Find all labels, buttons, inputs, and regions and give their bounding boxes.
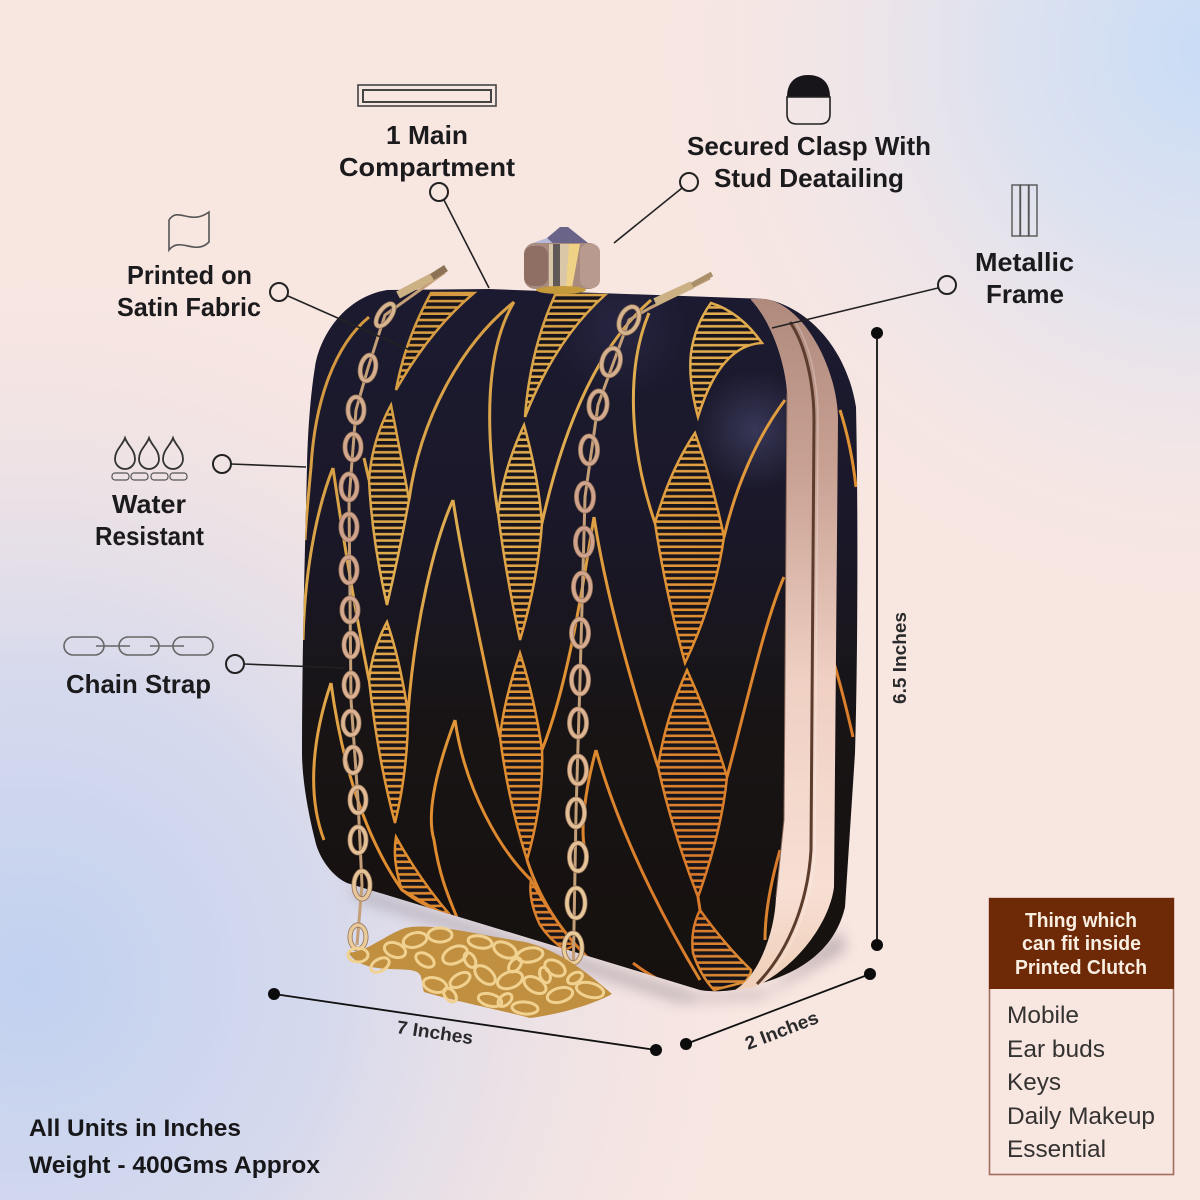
callout: main compartment: 1 Main (386, 120, 468, 150)
callout: metallic frame (772, 185, 1074, 328)
dimension: depth: 2 Inches (742, 1007, 821, 1054)
chain strap left (341, 268, 446, 949)
geometric print (303, 285, 856, 990)
callout: water resistant: Water (112, 489, 186, 519)
dimension: height (871, 327, 910, 951)
callout: main compartment: Compartment (339, 152, 515, 182)
dimension: width (268, 988, 662, 1056)
callout: water resistant: Resistant (95, 521, 204, 551)
panel header: Printed Clutch (1015, 957, 1147, 979)
callout: metallic frame: Metallic (975, 247, 1074, 277)
clasp stud (524, 227, 600, 294)
chain strap right (564, 274, 712, 985)
panel list: Keys (1007, 1069, 1061, 1096)
callout: water resistant (95, 438, 306, 551)
icon: fabric (169, 212, 209, 250)
icon: water drops (112, 438, 187, 480)
note: units and weight: All Units in Inches (29, 1115, 241, 1142)
panel list: Essential (1007, 1136, 1106, 1163)
icon: compartment (358, 85, 496, 106)
panel header (989, 898, 1174, 989)
chain pile (348, 926, 612, 1018)
callout: printed on satin fabric (117, 212, 410, 350)
panel header: Thing which (1025, 910, 1137, 932)
panel list: Ear buds (1007, 1036, 1105, 1063)
panel header: can fit inside (1022, 933, 1141, 955)
icon: frame (1012, 185, 1037, 236)
dimension: width: 7 Inches (395, 1016, 475, 1048)
panel list (1007, 1002, 1155, 1163)
clutch bag (302, 227, 857, 1018)
icon: clasp (787, 75, 830, 124)
callout: secured clasp (614, 75, 931, 243)
panel: things which fit inside (989, 898, 1174, 1174)
callout: printed on satin fabric: Satin Fabric (117, 292, 261, 322)
callout: metallic frame: Frame (986, 279, 1064, 309)
dimension: height: 6.5 Inches (889, 612, 910, 704)
bag body (302, 289, 857, 991)
metallic frame (735, 299, 838, 990)
dimension: depth (680, 968, 876, 1054)
callout: chain strap (64, 637, 345, 699)
callout: secured clasp: Secured Clasp With (687, 131, 931, 161)
callout: secured clasp: Stud Deatailing (714, 163, 904, 193)
panel list: Mobile (1007, 1002, 1079, 1029)
callout: printed on satin fabric: Printed on (127, 260, 252, 290)
callout: main compartment (339, 85, 515, 288)
floor shadow (345, 885, 846, 1002)
note: units and weight: Weight - 400Gms Approx (29, 1152, 321, 1179)
note: units and weight (29, 1115, 321, 1179)
icon: chain (64, 637, 213, 655)
callout: chain strap: Chain Strap (66, 669, 211, 699)
panel list: Daily Makeup (1007, 1103, 1155, 1130)
